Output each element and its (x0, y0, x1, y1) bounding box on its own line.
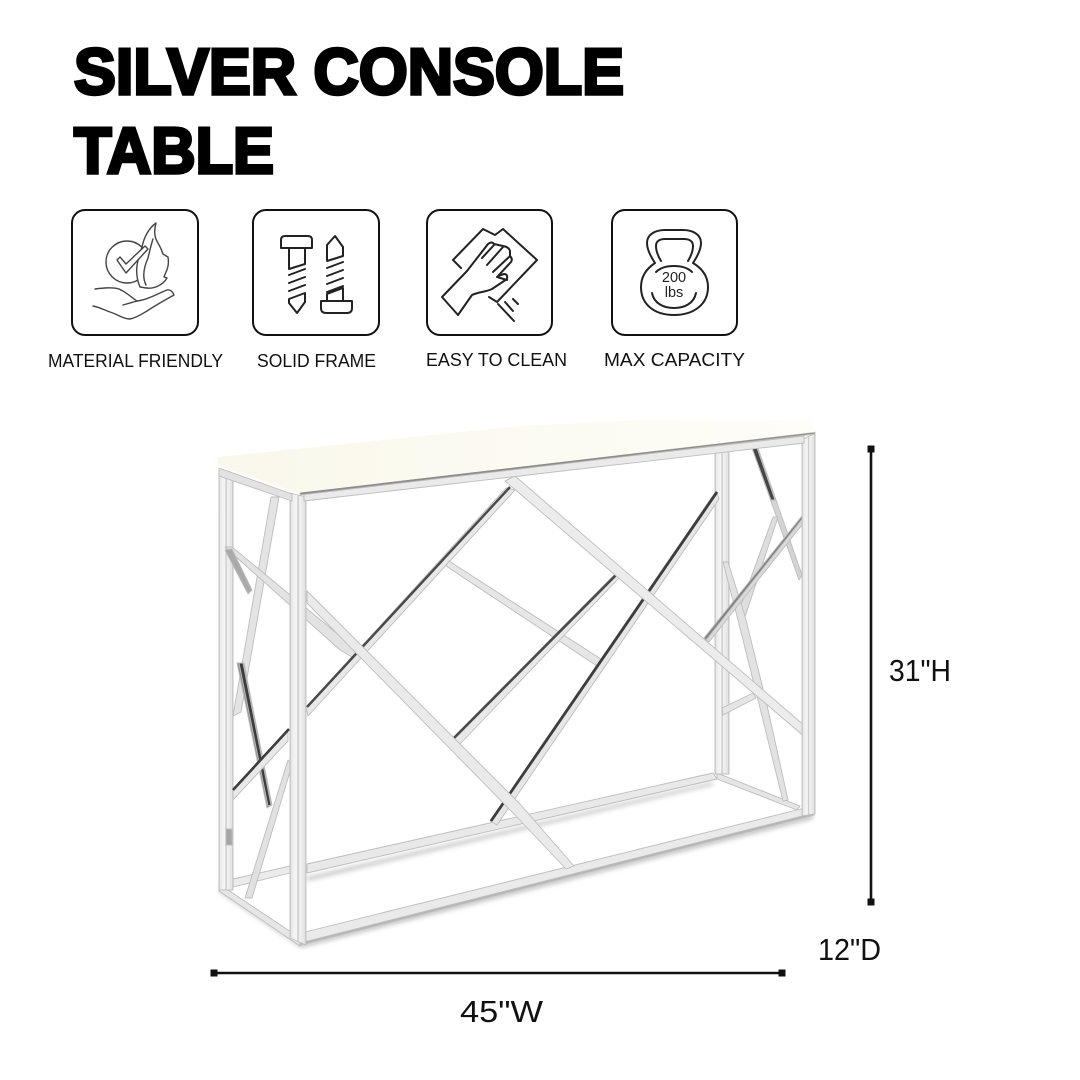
centre lattice bars (233, 488, 719, 825)
dimension: height (868, 446, 951, 906)
dark edges of lattice bars (233, 487, 717, 821)
label: EASY TO CLEAN (426, 349, 567, 370)
bottom frame rails (219, 773, 814, 946)
label: MATERIAL FRIENDLY (48, 350, 223, 371)
icon: flame with check in hand (93, 223, 174, 319)
feature: max capacity (604, 210, 745, 370)
dimension: width (210, 970, 786, 1029)
marble table top (218, 420, 815, 493)
left side lattice (225, 497, 357, 898)
top frame rails (219, 432, 815, 501)
console table photo (218, 420, 815, 948)
feature: easy to clean (426, 210, 567, 370)
dimension: depth: 12"D (818, 932, 881, 967)
icon: hand wiping with cloth (442, 229, 537, 321)
long front diagonals (307, 476, 806, 869)
icon: kettlebell 200 lbs: 200 (662, 270, 686, 286)
icon: screws (281, 236, 352, 313)
dimension: width: 45"W (460, 994, 544, 1029)
label: MAX CAPACITY (604, 349, 745, 370)
back legs (219, 450, 729, 890)
feature: material friendly (48, 210, 223, 371)
icon: kettlebell 200 lbs (641, 230, 708, 315)
title (74, 35, 624, 187)
right side lattice (704, 448, 809, 801)
feature: solid frame (253, 210, 379, 371)
title: TABLE (74, 114, 274, 187)
label: SOLID FRAME (257, 350, 376, 371)
icon: kettlebell 200 lbs: lbs (665, 285, 683, 301)
floor shadow (219, 782, 813, 948)
front legs (290, 433, 815, 945)
title: SILVER CONSOLE (74, 35, 624, 108)
dimension: height: 31"H (889, 653, 951, 688)
